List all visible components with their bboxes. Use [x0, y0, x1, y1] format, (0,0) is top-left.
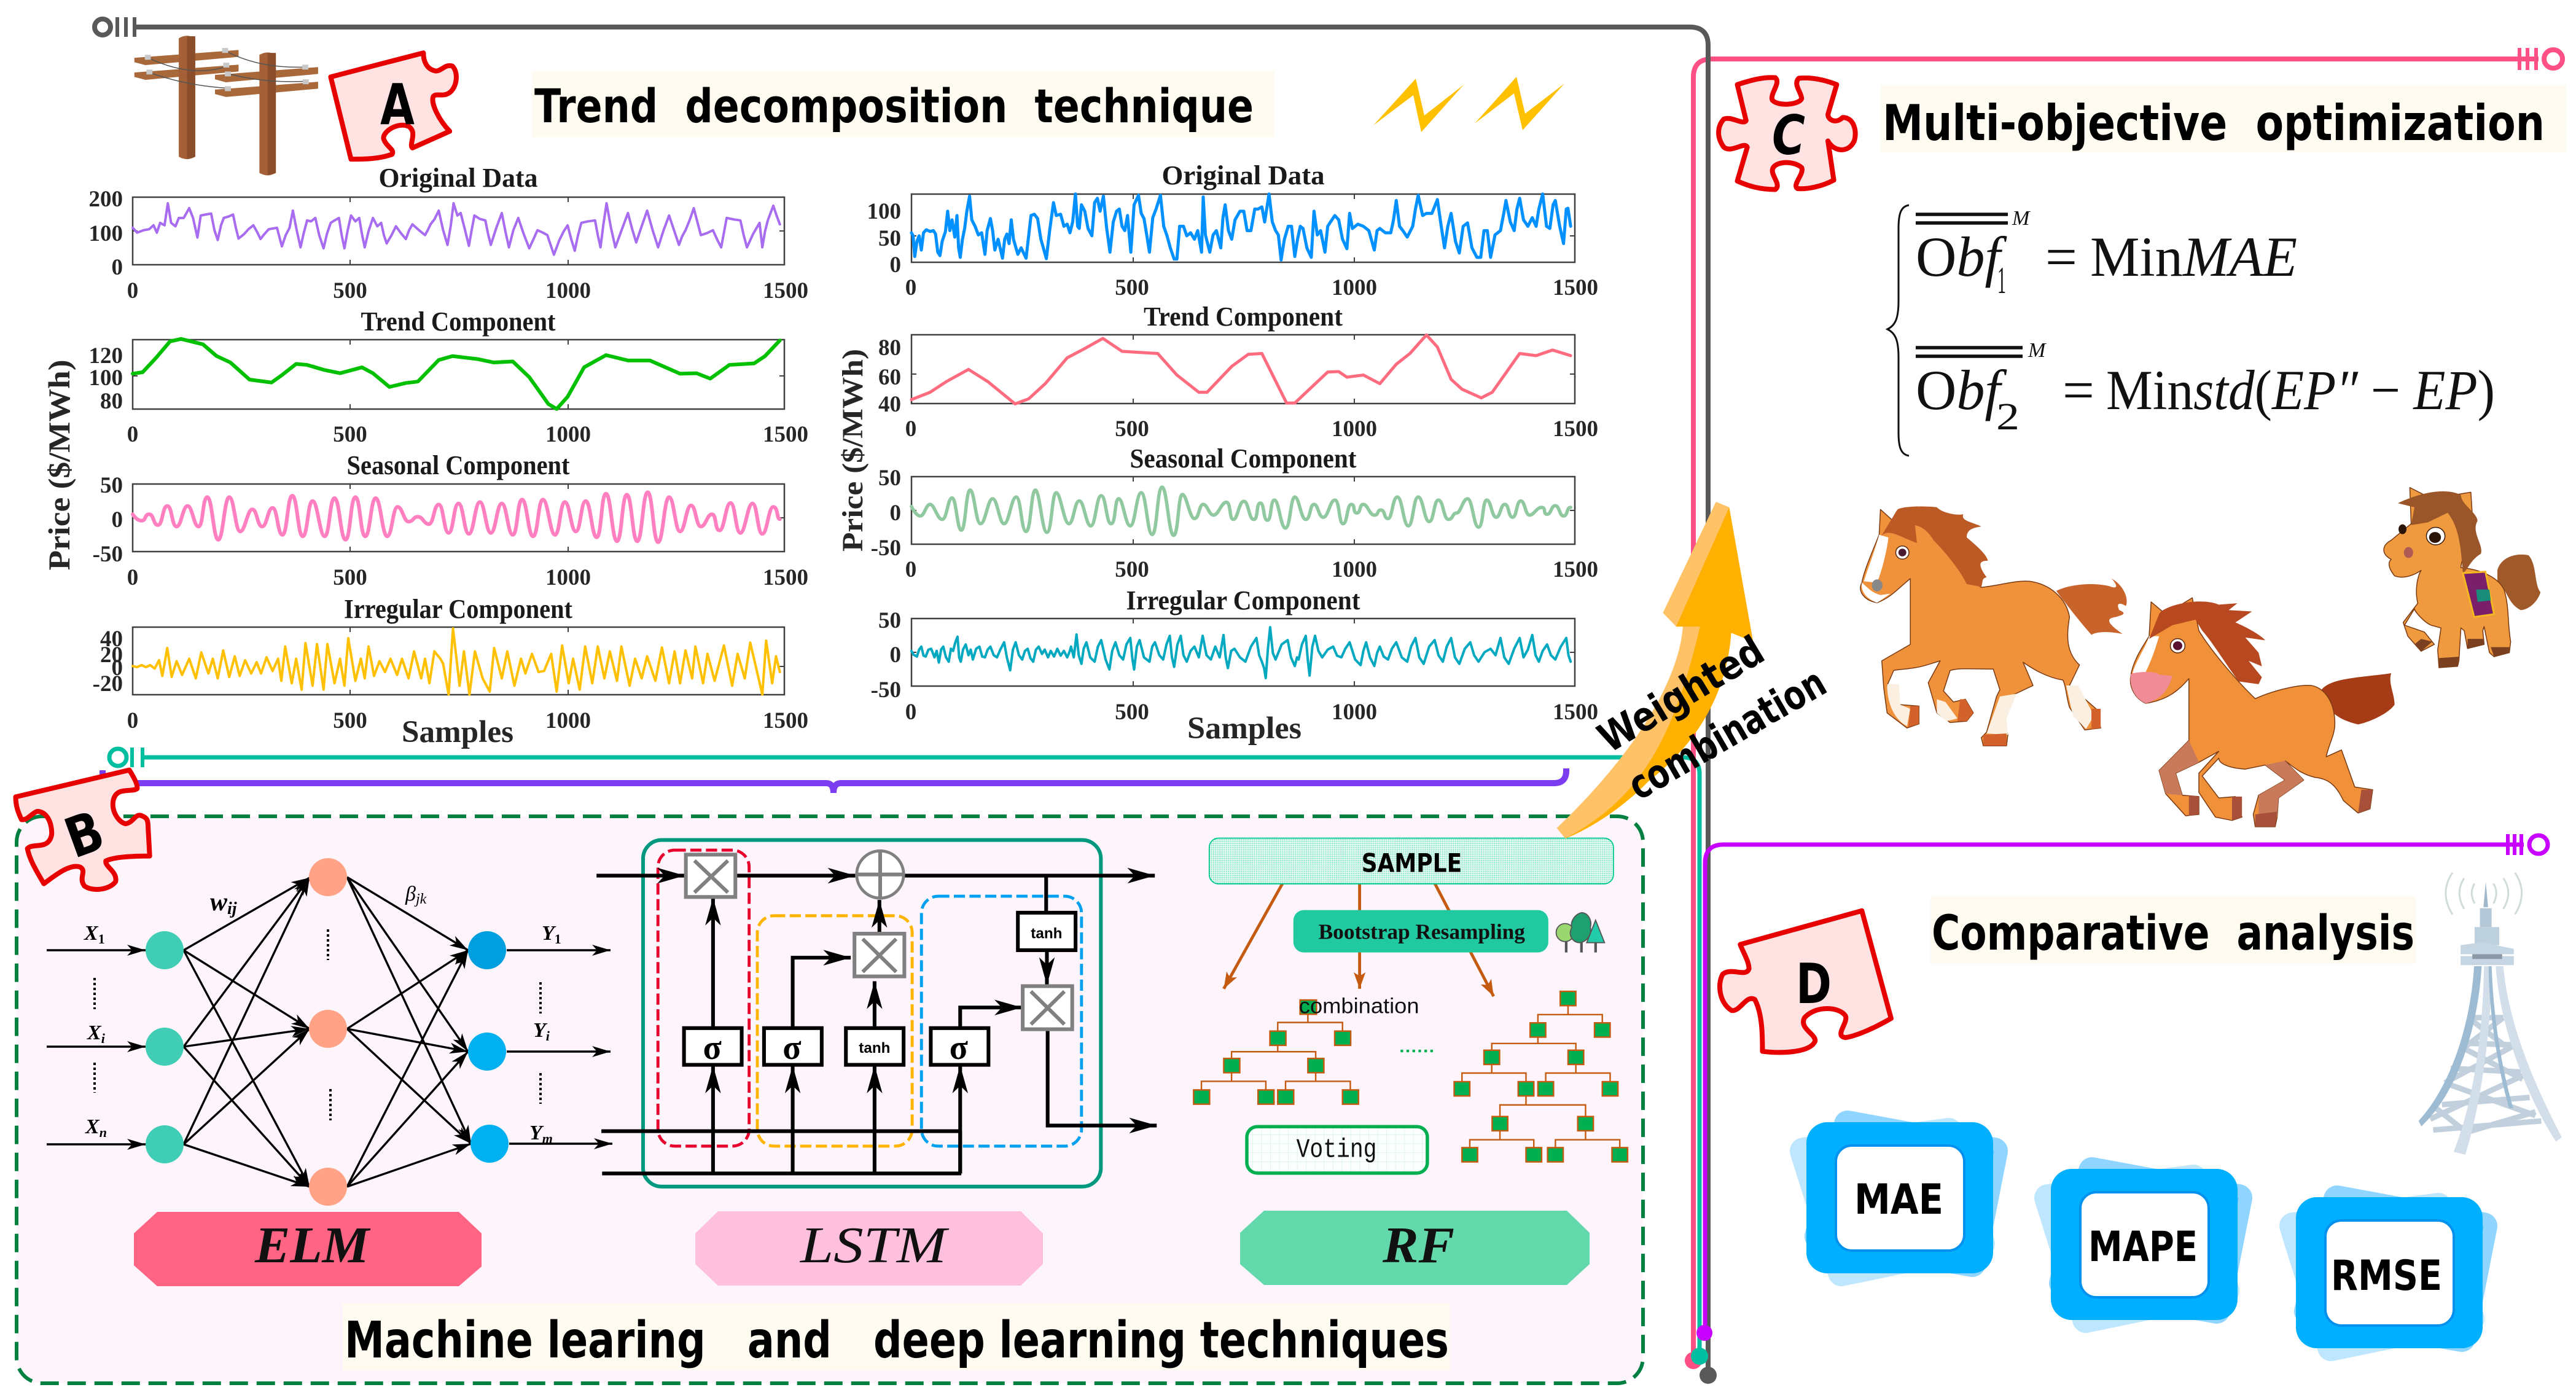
- chart: left seasonal component: 0: [127, 565, 138, 590]
- SAMPLE box: [1209, 838, 1614, 884]
- sigma boxes: σ: [703, 1029, 722, 1067]
- chart: right irregular component: 500: [1115, 700, 1149, 725]
- illustration: horse one: [1860, 507, 2127, 746]
- forget gate multiply: [686, 854, 735, 897]
- y axis label left: Price ($/MWh): [42, 360, 76, 570]
- chart: left irregular component: 40: [100, 627, 123, 652]
- chart: left trend component: 0: [127, 422, 138, 447]
- diagram: ELM network: [47, 858, 612, 1206]
- chart: right seasonal component: Seasonal Component: [1130, 443, 1357, 474]
- tanh boxes: [846, 913, 1075, 1065]
- illustration: horse three: [2384, 488, 2540, 668]
- metric card: RMSE: [2293, 1197, 2484, 1348]
- chart: left seasonal component: [93, 450, 808, 590]
- chart: right seasonal component: [871, 443, 1598, 582]
- label: ELM: ELM: [254, 1217, 371, 1274]
- chart: right trend component: 40: [878, 392, 901, 417]
- equations: objective functions: M: [2028, 339, 2047, 362]
- equations: objective functions: Minstd(EP″ − EP): [2106, 359, 2495, 421]
- voting box: Voting: [1297, 1136, 1376, 1166]
- chart: left irregular component: Irregular Component: [344, 594, 572, 624]
- sigma boxes: [684, 1028, 988, 1067]
- bootstrap resampling box: Bootstrap Resampling: [1319, 920, 1525, 944]
- chart: right trend component: 1500: [1553, 416, 1598, 442]
- chart: left seasonal component: 50: [100, 473, 123, 498]
- heading: machine learning: Machine learing and deep learning techniques: [345, 1311, 1449, 1370]
- chart: left trend component: 120: [88, 343, 123, 369]
- equations: objective functions: [1887, 205, 2495, 456]
- sigma boxes: σ: [783, 1029, 802, 1067]
- chart group: left decomposition: [42, 163, 808, 749]
- diagram: LSTM cell: [596, 840, 1157, 1187]
- chart: right trend component: Trend Component: [1144, 302, 1343, 332]
- chart: left trend component: 1000: [545, 422, 591, 447]
- arrow: weighted combination: [1557, 502, 1753, 838]
- icon: telecom tower: [2419, 873, 2562, 1155]
- chart: right irregular component: [871, 585, 1598, 725]
- chart: left original data: 1500: [763, 278, 808, 303]
- chart: right irregular component: 1000: [1332, 700, 1377, 725]
- illustration: horse two: [2130, 598, 2395, 827]
- puzzle piece C: [1719, 77, 1856, 190]
- chart: right irregular component: -50: [871, 678, 901, 703]
- equations: objective functions: 2: [1996, 396, 2020, 438]
- chart: left trend component: Trend Component: [361, 307, 556, 337]
- chart: left trend component: [88, 307, 808, 447]
- metric card: RMSE: RMSE: [2331, 1252, 2442, 1300]
- metric card: MAPE: MAPE: [2088, 1223, 2198, 1271]
- chart: right original data: 100: [867, 199, 901, 224]
- label: RF: [1240, 1211, 1590, 1285]
- chart: left trend component: 100: [88, 365, 123, 391]
- bootstrap resampling box: [1294, 910, 1548, 953]
- chart: left original data: [88, 163, 808, 303]
- ELM labels: X: [84, 922, 98, 945]
- tanh boxes: tanh: [859, 1040, 890, 1056]
- equations: objective functions: Obf: [1916, 359, 2007, 421]
- puzzle piece A: [330, 53, 456, 159]
- equations: objective functions: =: [2063, 359, 2094, 421]
- x axis label left: Samples: [402, 715, 513, 749]
- chart: right seasonal component: 0: [905, 557, 916, 582]
- label: LSTM: [695, 1211, 1043, 1286]
- ELM connections: [47, 877, 612, 1187]
- chart: left irregular component: [93, 594, 808, 733]
- chart: left seasonal component: 500: [333, 565, 367, 590]
- label: ELM: [134, 1212, 482, 1286]
- ELM nodes: [146, 858, 509, 1206]
- chart: left original data: 100: [88, 221, 123, 246]
- SAMPLE box: SAMPLE: [1362, 848, 1462, 878]
- ELM labels: w: [210, 888, 227, 916]
- metric card: MAE: MAE: [1854, 1176, 1943, 1224]
- chart: left irregular component: 0: [112, 655, 123, 681]
- puzzle piece C: C: [1772, 104, 1805, 167]
- chart: right seasonal component: 1500: [1553, 557, 1598, 582]
- icon: utility poles: [135, 36, 318, 175]
- connector line: section D magenta: [1696, 834, 2548, 1341]
- chart: left trend component: 500: [333, 422, 367, 447]
- chart: right seasonal component: 0: [889, 501, 901, 526]
- ELM labels: 1: [98, 931, 105, 947]
- puzzle piece D: D: [1796, 952, 1832, 1017]
- label: RF: RF: [1382, 1217, 1454, 1274]
- puzzle piece D: [1720, 911, 1891, 1052]
- chart: left irregular component: 1500: [763, 708, 808, 733]
- ELM labels: n: [100, 1125, 107, 1140]
- chart: right original data: 1500: [1553, 275, 1598, 300]
- voting box: [1247, 1127, 1427, 1173]
- connector line: section C pink: [1685, 48, 2562, 1369]
- chart: left seasonal component: -50: [93, 542, 123, 567]
- right decision tree: [1454, 991, 1628, 1162]
- chart: left original data: 200: [88, 187, 123, 212]
- ELM labels: i: [546, 1028, 550, 1044]
- heading: trend decomposition: Trend decomposition technique: [534, 79, 1254, 133]
- metric card: MAPE: [2048, 1169, 2239, 1320]
- sampling arrows: [1224, 882, 1494, 996]
- chart group: right decomposition: [837, 160, 1598, 746]
- chart: right original data: 500: [1115, 275, 1149, 300]
- chart: left seasonal component: 1500: [763, 565, 808, 590]
- chart: left original data: Original Data: [378, 163, 538, 193]
- chart: right irregular component: Irregular Component: [1126, 585, 1360, 615]
- chart: right irregular component: 50: [878, 608, 901, 633]
- puzzle piece B: [16, 770, 150, 889]
- diagram: random forest: [1193, 838, 1628, 1173]
- chart: left irregular component: -20: [93, 671, 123, 697]
- ELM labels: 1: [555, 931, 561, 947]
- label: weighted combination: Weighted: [1590, 627, 1772, 762]
- chart: right irregular component: 0: [889, 642, 901, 668]
- ELM labels: Y: [533, 1019, 546, 1042]
- ELM labels: β: [405, 883, 416, 905]
- chart: right original data: 0: [905, 275, 916, 300]
- ELM labels: jk: [414, 891, 427, 907]
- label: weighted combination: combination: [1620, 658, 1834, 810]
- chart: left seasonal component: 0: [112, 507, 123, 533]
- equations: objective functions: M: [2012, 207, 2031, 230]
- ELM labels: Y: [542, 922, 555, 945]
- equations: objective functions: =: [2045, 225, 2077, 288]
- chart: right irregular component: 0: [905, 700, 916, 725]
- chart: right trend component: 1000: [1332, 416, 1377, 442]
- chart: right trend component: 500: [1115, 416, 1149, 442]
- stray label: combination: combination: [1299, 994, 1419, 1018]
- panel: machine learning models: [17, 816, 1643, 1383]
- left decision tree: [1193, 1000, 1359, 1104]
- chart: right seasonal component: 50: [878, 466, 901, 491]
- purple brace: [103, 768, 1566, 793]
- x axis label right: Samples: [1187, 711, 1302, 746]
- chart: left original data: 0: [127, 278, 138, 303]
- chart: right seasonal component: 500: [1115, 557, 1149, 582]
- icon: trees: [1556, 913, 1604, 953]
- chart: left irregular component: 20: [100, 642, 123, 668]
- chart: right trend component: [878, 302, 1598, 442]
- ELM labels: m: [542, 1131, 553, 1146]
- output gate multiply: [1023, 986, 1072, 1029]
- label: LSTM: LSTM: [800, 1217, 950, 1274]
- chart: left original data: 0: [112, 255, 123, 280]
- connector line: section A gray: [95, 17, 1717, 1384]
- chart: left irregular component: 0: [127, 708, 138, 733]
- chart: left original data: 1000: [545, 278, 591, 303]
- equations: objective functions: MinMAE: [2090, 225, 2297, 288]
- chart: right trend component: 60: [878, 365, 901, 390]
- heading: comparative analysis: [1930, 896, 2416, 964]
- puzzle piece B: B: [57, 799, 112, 872]
- sigma boxes: σ: [950, 1029, 969, 1067]
- chart: right seasonal component: -50: [871, 536, 901, 561]
- sum node: [857, 851, 904, 898]
- ELM labels: ij: [227, 899, 237, 918]
- ELM labels: [84, 883, 561, 1146]
- equations: objective functions: Obf: [1916, 225, 2007, 288]
- heading: comparative analysis: Comparative analysis: [1932, 906, 2414, 961]
- ELM labels: X: [87, 1021, 101, 1044]
- chart: left original data: 500: [333, 278, 367, 303]
- chart: left irregular component: 1000: [545, 708, 591, 733]
- metric card: MAE: [1803, 1122, 1994, 1273]
- tanh boxes: tanh: [1031, 925, 1062, 942]
- chart: right trend component: 80: [878, 335, 901, 361]
- equations: objective functions: 1: [1997, 260, 2006, 302]
- chart: right original data: 0: [889, 252, 901, 278]
- y axis label right: Price ($/MWh): [837, 349, 869, 552]
- chart: right irregular component: 1500: [1553, 700, 1598, 725]
- ELM labels: i: [101, 1031, 106, 1046]
- chart: right original data: 50: [878, 226, 901, 251]
- chart: left seasonal component: Seasonal Component: [346, 450, 570, 480]
- puzzle piece A: A: [380, 72, 415, 138]
- chart: right original data: [867, 160, 1598, 300]
- ELM labels: X: [85, 1115, 100, 1138]
- chart: right trend component: 0: [905, 416, 916, 442]
- input gate multiply: [854, 934, 904, 977]
- chart: left trend component: 80: [100, 389, 123, 414]
- chart: right seasonal component: 1000: [1332, 557, 1377, 582]
- chart: left irregular component: 500: [333, 708, 367, 733]
- connector line: section B teal: [109, 748, 1708, 1365]
- ELM labels: Y: [529, 1122, 542, 1144]
- chart: right original data: 1000: [1332, 275, 1377, 300]
- icon: lightning bolts: [1373, 77, 1564, 132]
- chart: right original data: Original Data: [1162, 160, 1324, 190]
- chart: left trend component: 1500: [763, 422, 808, 447]
- chart: left seasonal component: 1000: [545, 565, 591, 590]
